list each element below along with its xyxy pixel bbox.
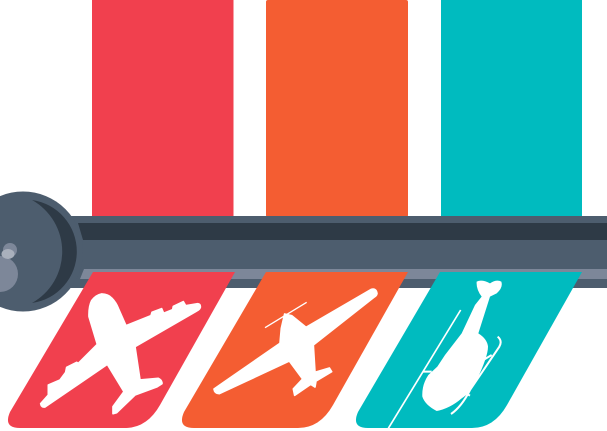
panel: orange lower slanted tab — [182, 272, 408, 428]
panel: red upper banner — [92, 0, 234, 217]
panel: teal lower slanted tab — [356, 272, 582, 428]
icon: white jet airliner — [41, 294, 200, 414]
panel: teal upper banner — [441, 0, 582, 217]
panel: red lower slanted tab — [8, 272, 235, 428]
ball joint — [0, 192, 83, 312]
panel: orange upper banner — [266, 0, 408, 217]
rod: horizontal bar — [60, 216, 607, 288]
icon: white propeller plane — [214, 289, 377, 395]
icon: white helicopter — [388, 281, 502, 428]
icon detail: propeller blade — [265, 302, 307, 328]
icon detail: landing skid — [423, 337, 501, 414]
icon detail: rotor blade — [388, 310, 461, 428]
